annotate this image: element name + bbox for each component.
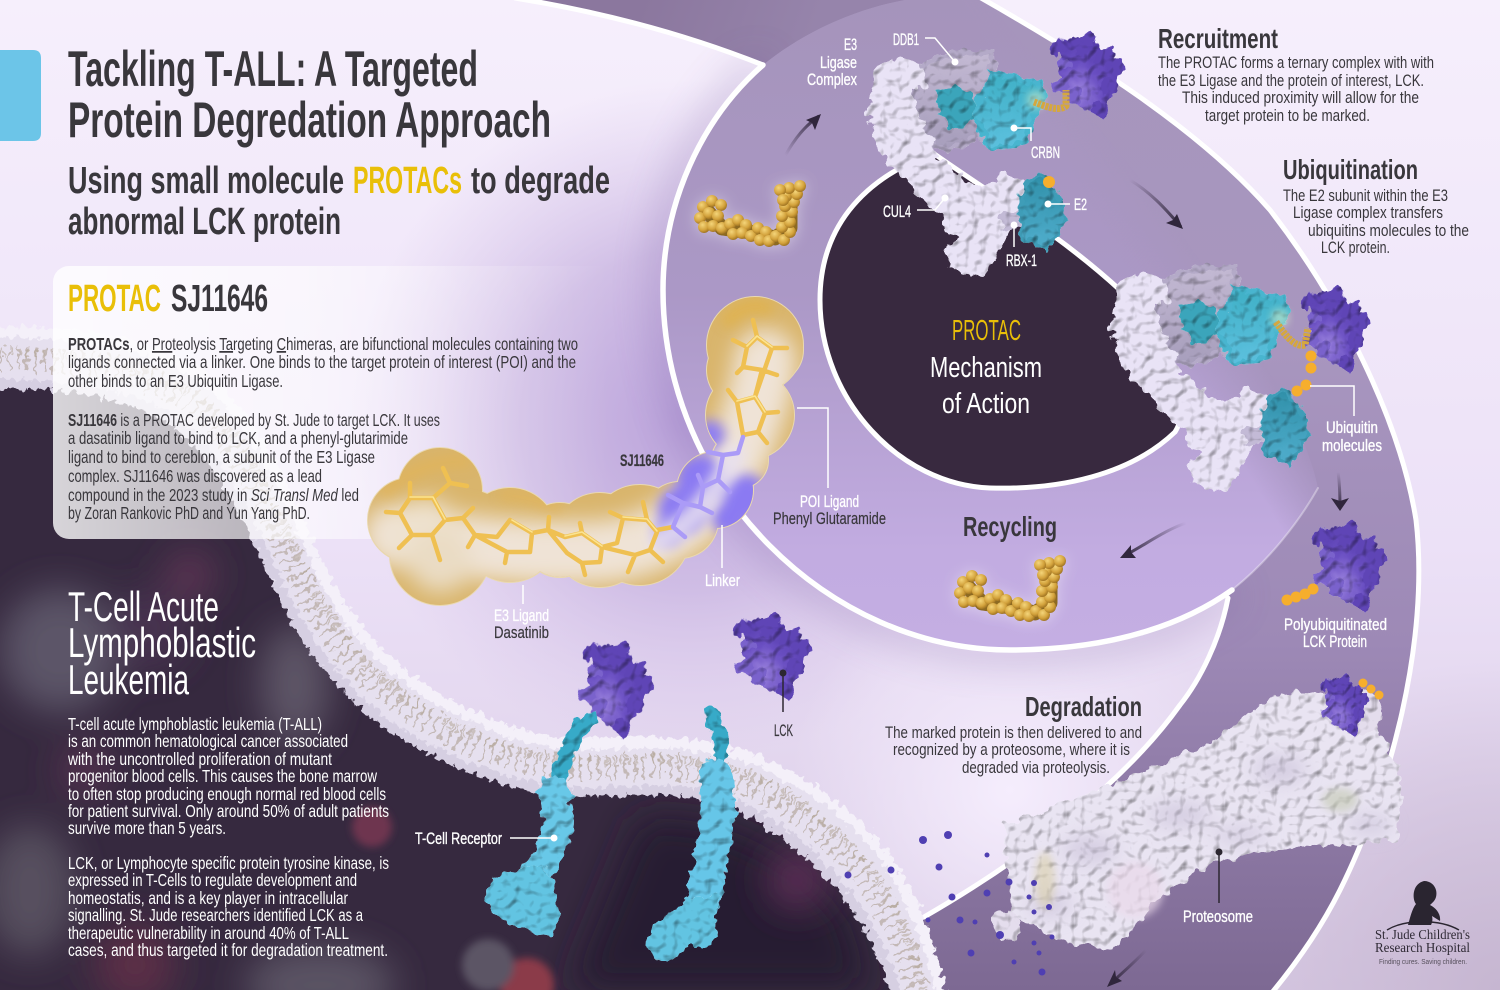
gold skeleton [386, 320, 787, 575]
ubiquitination description [1283, 187, 1469, 257]
T-ALL description text: progenitor blood cells. This causes the bone marrow [68, 766, 377, 786]
panel: mechanism inner ring [666, 68, 1317, 648]
protein: polyubiquitinated LCK [1282, 520, 1388, 611]
recruitment description: the E3 Ligase and the protein of interest, LCK. [1158, 72, 1424, 90]
card text: PROTACs definition: ligands connected via a linker. One binds to the target protein of interest (POI) and the [68, 352, 576, 372]
T-ALL heading: Leukemia [68, 656, 189, 703]
recruitment description: target protein to be marked. [1205, 107, 1370, 125]
T-ALL description text: is an common hematological cancer associated [68, 731, 348, 751]
T-ALL description text: with the uncontrolled proliferation of mutant [67, 749, 332, 769]
card text: PROTACs definition: PROTACs, or Proteolysis Targeting Chimeras, are bifunctional molecules containing two [68, 334, 578, 354]
heading: Degradation [885, 691, 1142, 777]
label: SJ11646 molecule: SJ11646 [620, 452, 664, 470]
label: Ubiquitin molecules [1310, 386, 1382, 455]
PROTAC linker in complex [1027, 90, 1066, 109]
panel: outer spiral band [515, 0, 1419, 990]
protein: T-cell receptor right [648, 712, 721, 962]
label: E3 Ligase Complex: Complex [807, 71, 858, 89]
heading: Recruitment [1158, 23, 1434, 125]
icon: child silhouette [1408, 881, 1440, 925]
T-ALL description text [67, 714, 389, 838]
card text: SJ11646 description: compound in the 2023 study in Sci Transl Med led [68, 485, 359, 505]
label: CUL4: CUL4 [883, 203, 911, 221]
LCK description text: signalling. St. Jude researchers identified LCK as a [68, 905, 363, 925]
label: LCK: LCK [774, 722, 793, 740]
panel: PROTAC SJ11646 information card [53, 266, 653, 539]
heading: Degradation: Degradation [1025, 691, 1142, 722]
white spiral outlines [515, 0, 1419, 990]
label: E3 Ligand [494, 585, 549, 642]
heading: PROTAC Mechanism of Action: PROTAC [952, 315, 1021, 347]
recruitment description: The PROTAC forms a ternary complex with with [1158, 54, 1434, 72]
degraded protein fragments [844, 831, 1054, 976]
degradation description [885, 724, 1142, 777]
label: E3 Ligand: Dasatinib [494, 624, 549, 642]
T-ALL description text: for patient survival. Only around 50% of adult patients [68, 801, 389, 821]
protein: proteasome [991, 673, 1399, 947]
recycled PROTAC molecule [954, 555, 1066, 622]
label: Proteosome [1183, 848, 1253, 926]
T-ALL heading: Lymphoblastic [68, 619, 256, 666]
PROTAC linker [1271, 309, 1308, 345]
T-ALL heading: T-Cell Acute [68, 583, 219, 630]
ubiquitination description: ubiquitins molecules to the [1308, 222, 1469, 240]
recruitment description: This induced proximity will allow for the [1182, 89, 1419, 107]
SJ11646 large molecule model [360, 285, 810, 615]
arrow: recycling [1120, 523, 1186, 558]
label: Polyubiquitinated LCK Protein [1284, 616, 1387, 651]
title [68, 41, 551, 148]
T-ALL description text: to often stop producing enough normal red blood cells [68, 784, 386, 804]
heading: PROTAC Mechanism of Action: of Action [942, 388, 1030, 420]
T-ALL heading [68, 583, 256, 703]
LCK description text: cases, and thus targeted it for degradation treatment. [68, 940, 388, 960]
arrow: to ubiquitination [1130, 180, 1183, 229]
label: CRBN: CRBN [1031, 144, 1060, 162]
label: DDB1: DDB1 [893, 31, 919, 49]
E3 ligase complex [870, 53, 1065, 277]
subtitle [68, 160, 610, 243]
title: Protein Degredation Approach [68, 92, 551, 148]
protein: T-cell receptor left [488, 720, 590, 935]
LCK description text: therapeutic vulnerability in around 40% of T-ALL [68, 923, 349, 943]
degradation description: degraded via proteolysis. [962, 759, 1110, 777]
ubiquitination description: The E2 subunit within the E3 [1283, 187, 1448, 205]
LCK description text [68, 853, 389, 960]
LCK protein in complex [1050, 31, 1126, 118]
card text: PROTACs definition: other binds to an E3 Ubiquitin Ligase. [68, 371, 283, 391]
label: Polyubiquitinated LCK Protein: Polyubiquitinated [1284, 616, 1387, 634]
gold surface [360, 285, 810, 615]
cell membrane [0, 332, 942, 990]
heading: Ubiquitination [1283, 154, 1469, 257]
card heading: PROTAC [68, 278, 161, 320]
card text: SJ11646 description: complex. SJ11646 was discovered as a lead [68, 466, 322, 486]
subtitle: Using small molecule [68, 160, 344, 202]
LCK protein [1301, 285, 1371, 372]
label: Proteosome: Proteosome [1183, 908, 1253, 926]
label: RBX-1: RBX-1 [1006, 252, 1037, 270]
label: DDB1 [893, 31, 958, 66]
arrows [785, 114, 1349, 987]
label: RBX-1 [1006, 222, 1037, 270]
heading: Ubiquitination: Ubiquitination [1283, 154, 1418, 185]
logo: St. Jude Children's Research Hospital: Research Hospital [1375, 940, 1470, 955]
teal title tab [0, 50, 41, 141]
title: Tackling T-ALL: A Targeted [68, 41, 478, 97]
T-ALL description text: T-cell acute lymphoblastic leukemia (T-ALL) [68, 714, 322, 734]
heading: Recycling: Recycling [963, 511, 1057, 542]
ubiquitination description: LCK protein. [1321, 239, 1390, 257]
card heading: SJ11646 [171, 278, 268, 320]
protein: free LCK [733, 612, 813, 699]
free PROTAC molecule [694, 180, 806, 247]
label: E3 Ligase Complex [807, 36, 858, 89]
label: CRBN [1010, 124, 1060, 162]
protein: ternary complex recruitment [870, 31, 1126, 277]
card text: PROTACs definition [68, 334, 578, 391]
LCK description text: homeostatis, and is a key player in intracellular [68, 888, 348, 908]
label: E2: E2 [1074, 196, 1087, 214]
card text: SJ11646 description [68, 410, 440, 523]
card text: SJ11646 description: by Zoran Rankovic PhD and Yun Yang PhD. [68, 503, 310, 523]
LCK entering proteasome [1320, 673, 1370, 736]
logo: St. Jude Children's Research Hospital [1375, 881, 1470, 966]
label: E3 Ligase Complex: Ligase [820, 54, 857, 72]
subtitle: PROTACs [353, 160, 462, 202]
logo: St. Jude Children's Research Hospital: St. Jude Children's [1375, 927, 1470, 942]
label: T-Cell Receptor: T-Cell Receptor [415, 830, 502, 848]
label: Ubiquitin molecules: Ubiquitin [1326, 419, 1378, 437]
card text: SJ11646 description: SJ11646 is a PROTAC developed by St. Jude to target LCK. It uses [68, 410, 440, 430]
subtitle: to degrade [471, 160, 610, 202]
E3 ligase complex copy [1113, 268, 1308, 492]
label: Ubiquitin molecules: molecules [1322, 437, 1382, 455]
LCK description text: expressed in T-Cells to regulate development and [68, 870, 357, 890]
ubiquitination description: Ligase complex transfers [1293, 204, 1443, 222]
label: E3 Ligase Complex: E3 [844, 36, 857, 54]
heading: PROTAC Mechanism of Action: Mechanism [930, 352, 1042, 384]
arrow: to polyubiquitin [1331, 472, 1349, 511]
heading: Recruitment: Recruitment [1158, 23, 1278, 54]
recruitment description [1158, 54, 1434, 125]
protein: LCK bound to T-cell receptor [571, 633, 661, 742]
panel: PROTAC mechanism of action centre [820, 153, 1182, 488]
arrow: degradation exit [1107, 950, 1146, 987]
linker skeleton [668, 437, 743, 537]
protein: ubiquitination complex [1113, 268, 1371, 492]
T-ALL description text: survive more than 5 years. [68, 818, 226, 838]
logo: St. Jude Children's Research Hospital: Finding cures. Saving children. [1379, 959, 1467, 966]
label: POI Ligand: POI Ligand [800, 493, 859, 511]
label: POI Ligand: Phenyl Glutaramide [773, 510, 886, 528]
label: Polyubiquitinated LCK Protein: LCK Protein [1303, 633, 1367, 651]
label: POI Ligand [773, 408, 886, 528]
LCK description text: LCK, or Lymphocyte specific protein tyrosine kinase, is [68, 853, 389, 873]
subtitle: abnormal LCK protein [68, 201, 341, 243]
card text: SJ11646 description: a dasatinib ligand to bind to LCK, and a phenyl-glutarimide [68, 428, 408, 448]
label: E2 [1044, 196, 1087, 214]
label: Linker: Linker [705, 572, 740, 590]
degradation description: recognized by a proteosome, where it is [893, 741, 1130, 759]
card text: SJ11646 description: ligand to bind to cereblon, a subunit of the E3 Ligase [68, 447, 375, 467]
degradation description: The marked protein is then delivered to and [885, 724, 1142, 742]
ubiquitin on E2 [1043, 176, 1055, 188]
heading: PROTAC Mechanism of Action [930, 315, 1042, 420]
ubiquitin molecules [1292, 350, 1316, 396]
label: LCK [774, 670, 793, 740]
label: CUL4 [883, 194, 948, 221]
panel: dark cell interior with blurred blood cells [0, 358, 918, 990]
label: E3 Ligand: E3 Ligand [494, 607, 549, 625]
arrow: to E3 ligase [785, 114, 821, 156]
label: Linker [705, 525, 740, 590]
